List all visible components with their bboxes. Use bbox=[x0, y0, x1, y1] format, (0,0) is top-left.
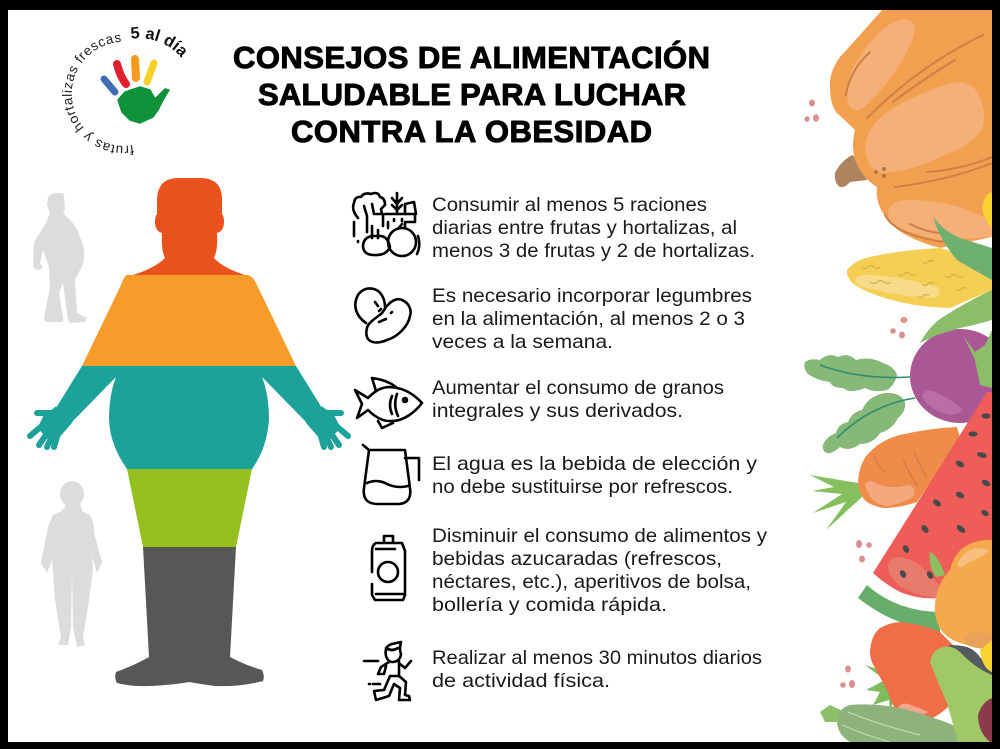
orange bbox=[930, 540, 992, 649]
text: physical activity: de actividad física. bbox=[432, 670, 610, 692]
text: fruits and vegetables: diarias entre frutas y hortalizas, al bbox=[432, 217, 737, 239]
text: water: El agua es la bebida de elección y bbox=[432, 453, 757, 475]
text: fruits and vegetables bbox=[432, 194, 755, 262]
seed dots bbox=[804, 100, 908, 688]
left hand bbox=[30, 407, 72, 447]
text: legumes: veces a la semana. bbox=[432, 331, 613, 353]
avocado bbox=[930, 640, 992, 742]
body section: legs bbox=[115, 547, 264, 686]
text: fruits and vegetables: menos 3 de frutas y 2 de hortalizas. bbox=[432, 240, 755, 262]
green leaves bbox=[804, 217, 992, 453]
body section: torso and arms bbox=[30, 366, 348, 469]
title bbox=[233, 39, 710, 149]
icon: water jug bbox=[363, 445, 419, 504]
text: water: no debe sustituirse por refrescos. bbox=[432, 476, 733, 498]
logo: 5 al día: frutas y hortalizas frescas bbox=[62, 34, 134, 156]
body section: head bbox=[133, 178, 245, 275]
cucumber bbox=[820, 704, 960, 742]
body section: shoulders bbox=[82, 275, 296, 366]
text: sugary food: bollería y comida rápida. bbox=[432, 594, 667, 616]
icon: fish bbox=[355, 378, 422, 428]
eggplant bbox=[910, 329, 1000, 423]
icon: beans bbox=[355, 288, 411, 342]
text: legumes: en la alimentación, al menos 2 o 3 bbox=[432, 308, 745, 330]
carrot bbox=[810, 427, 960, 530]
text: whole grains bbox=[432, 377, 724, 422]
text: fruits and vegetables: Consumir al menos 5 raciones bbox=[432, 194, 707, 216]
icon: coloured hand bbox=[104, 59, 169, 123]
corn bbox=[847, 248, 992, 308]
body figure bbox=[30, 178, 348, 686]
logo: 5 al día bbox=[62, 26, 186, 156]
icon: fruits and vegetables bbox=[353, 193, 419, 256]
title: SALUDABLE PARA LUCHAR bbox=[258, 77, 686, 112]
text: legumes bbox=[432, 285, 752, 353]
text: water bbox=[432, 453, 757, 498]
text: physical activity bbox=[432, 647, 762, 692]
watermelon bbox=[858, 392, 992, 632]
yellow fruit bbox=[982, 192, 992, 228]
title: CONTRA LA OBESIDAD bbox=[291, 114, 652, 149]
right hand bbox=[306, 407, 348, 447]
text: sugary food bbox=[432, 525, 767, 616]
icon: runner bbox=[364, 642, 411, 700]
title: CONSEJOS DE ALIMENTACIÓN bbox=[233, 39, 710, 75]
text: sugary food: Disminuir el consumo de alimentos y bbox=[432, 525, 767, 547]
icon: soda can bbox=[372, 536, 405, 600]
body section: hips bbox=[127, 469, 252, 547]
vegetable border bbox=[804, 9, 1000, 742]
grey silhouette: woman bbox=[41, 481, 102, 647]
text: sugary food: néctares, etc.), aperitivos de bolsa, bbox=[432, 571, 751, 593]
text: physical activity: Realizar al menos 30 minutos diarios bbox=[432, 647, 762, 669]
text: whole grains: Aumentar el consumo de granos bbox=[432, 377, 724, 399]
text: whole grains: integrales y sus derivados. bbox=[432, 400, 683, 422]
grey silhouette: man bbox=[33, 193, 87, 323]
text: legumes: Es necesario incorporar legumbres bbox=[432, 285, 752, 307]
tomato bbox=[865, 622, 953, 720]
text: sugary food: bebidas azucaradas (refrescos, bbox=[432, 548, 722, 570]
pumpkin bbox=[830, 9, 992, 248]
logo: 5 al día: 5 al día bbox=[131, 26, 186, 58]
